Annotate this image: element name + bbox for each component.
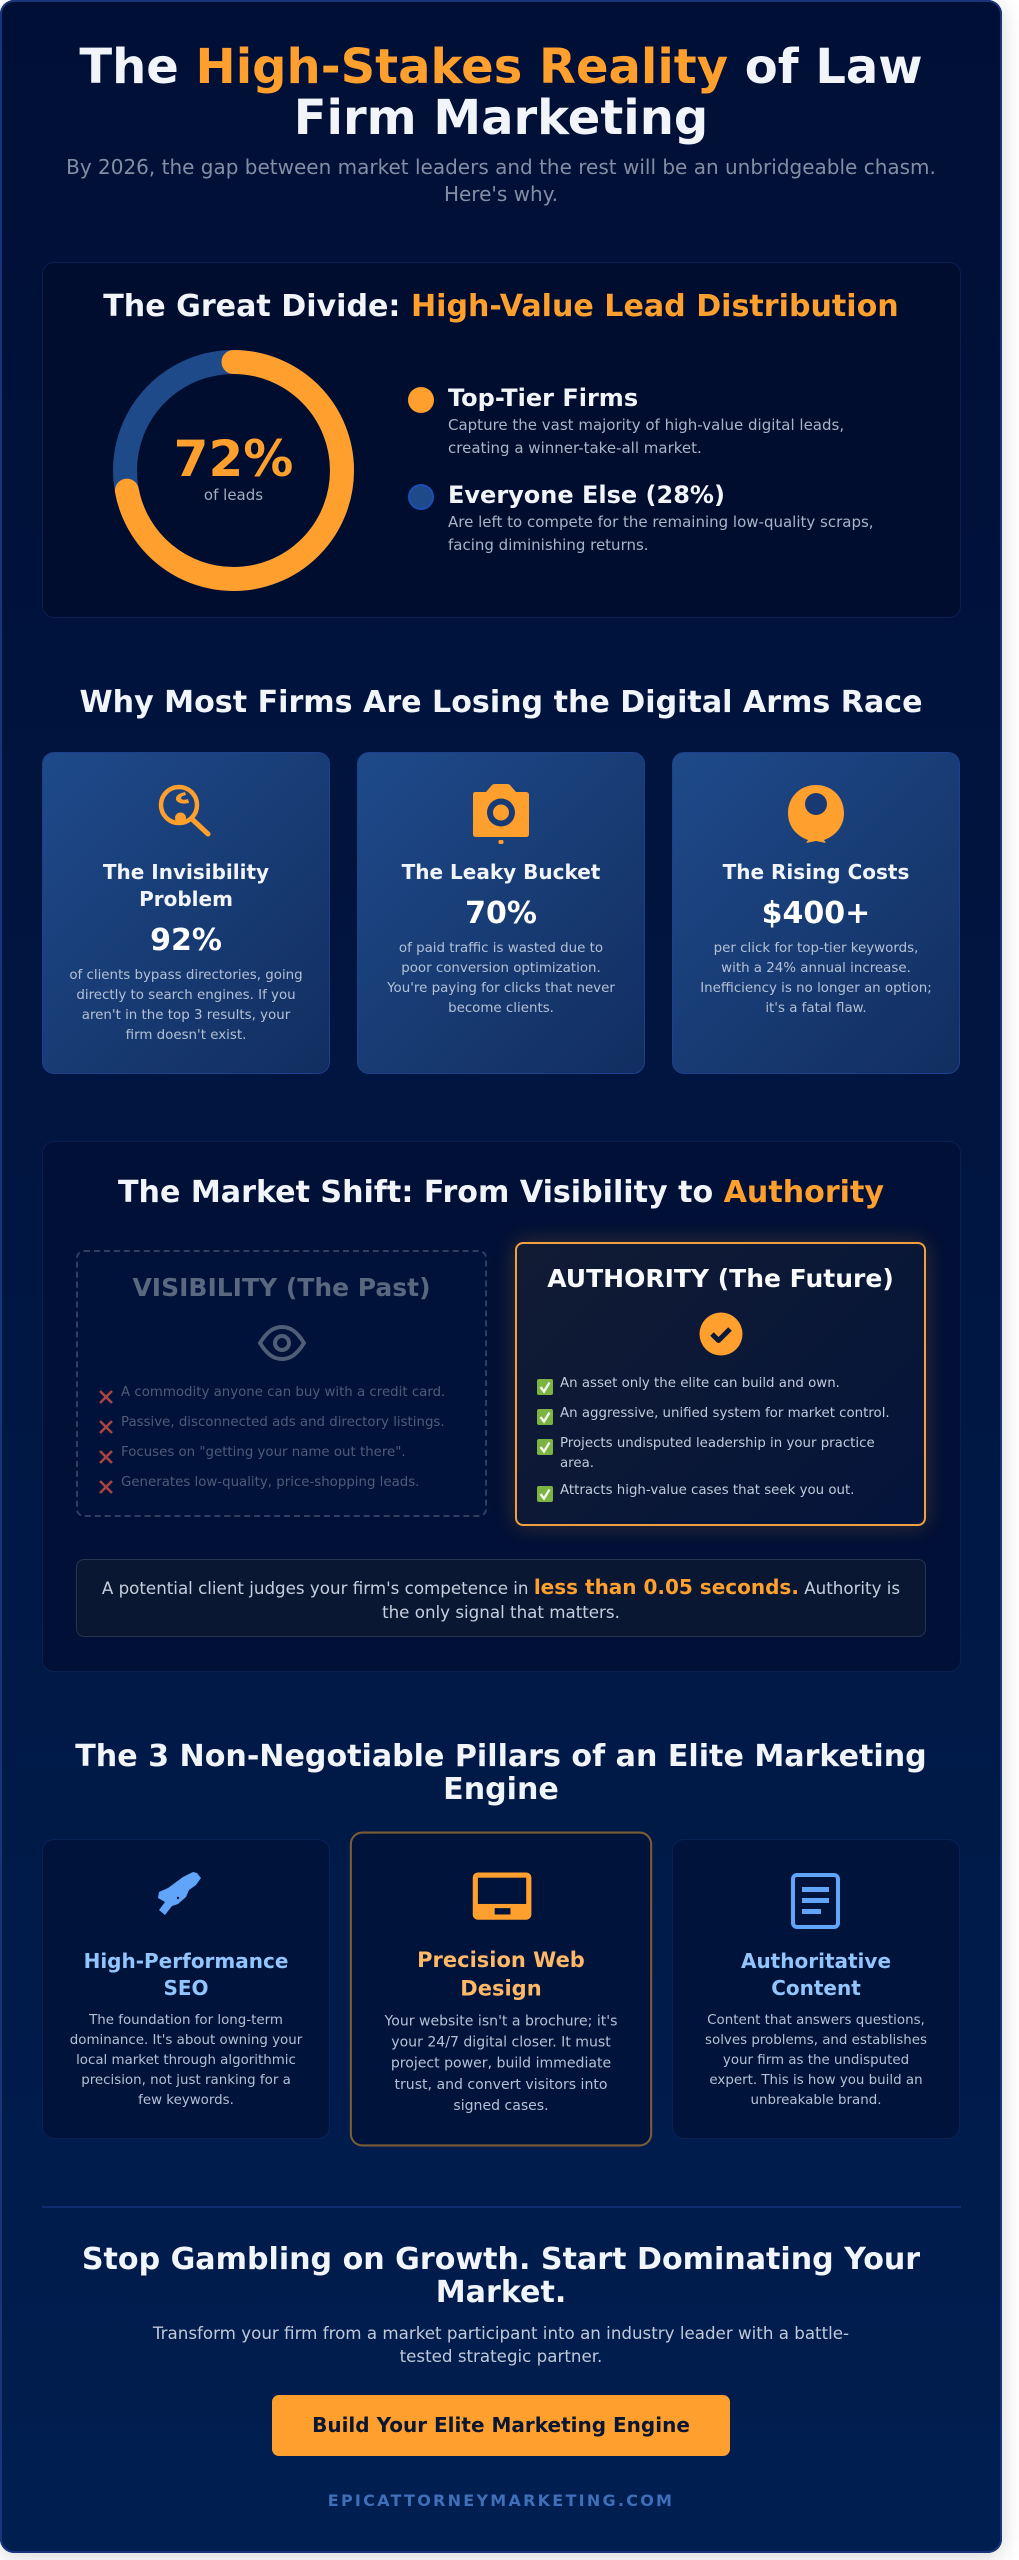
pillar description: [705, 2013, 927, 2108]
list item 2: An aggressive, unified system for market control.: [560, 1406, 890, 1421]
pillar description: expert. This is how you build an: [709, 2073, 923, 2088]
pillar description: The foundation for long-term: [89, 2013, 283, 2028]
pillar description: precision, not just ranking for a: [81, 2073, 291, 2088]
pillar description: dominance. It's about owning your: [70, 2033, 302, 2048]
card description: Inefficiency is no longer an option;: [700, 981, 932, 996]
pillar description: trust, and convert visitors into: [395, 2077, 607, 2093]
icon: document: [791, 1873, 840, 1929]
icon: camera bucket: [473, 784, 529, 844]
legend text: top-tier firms: creating a winner-take-all market.: [448, 439, 702, 457]
legend text: top-tier firms: Capture the vast majority of high-value digital leads,: [448, 416, 844, 434]
legend text: top-tier firms: Top-Tier Firms: [448, 384, 638, 412]
card description: with a 24% annual increase.: [721, 961, 911, 976]
pillar title: Design: [460, 1975, 542, 2001]
list item 3: Projects undisputed leadership in your practice: [560, 1436, 875, 1451]
title: The High-Stakes Reality of Law: [79, 39, 923, 95]
legend text: everyone else: [448, 481, 874, 554]
pillar title: [741, 1949, 891, 2000]
list item 2: Passive, disconnected ads and directory listings.: [121, 1415, 445, 1430]
icon: check circle: [700, 1312, 742, 1356]
donut chart: 72 percent of leads: [113, 350, 354, 591]
card description: [69, 968, 303, 1043]
callout: 0.05 seconds: [76, 1559, 926, 1637]
list item 1: An asset only the elite can build and own.: [560, 1376, 840, 1391]
visibility heading: VISIBILITY (The Past): [132, 1273, 431, 1302]
card title: The Rising Costs: [723, 860, 909, 884]
card description: firm doesn't exist.: [126, 1028, 246, 1043]
heading: three pillars: The 3 Non-Negotiable Pillars of an Elite Marketing: [75, 1738, 927, 1774]
call to action subtext: Transform your firm from a market participant into an industry leader with a battle-: [153, 2323, 849, 2343]
heading: the great divide: The Great Divide: High-Value Lead Distribution: [103, 288, 899, 324]
authority heading: AUTHORITY (The Future): [547, 1264, 894, 1293]
panel: rising costs: [672, 752, 960, 1074]
list item 3: area.: [560, 1456, 594, 1471]
pillar description: solves problems, and establishes: [705, 2033, 927, 2048]
call to action subtext: tested strategic partner.: [400, 2346, 602, 2366]
footer website: EPICATTORNEYMARKETING.COM: [328, 2491, 674, 2510]
icon: eye: [258, 1325, 306, 1361]
icon: magnifier: [158, 784, 210, 836]
card description: [387, 941, 615, 1016]
heading: three pillars: [75, 1738, 927, 1806]
statistic: 70%: 70%: [465, 896, 537, 931]
list item 4: Generates low-quality, price-shopping leads.: [121, 1475, 419, 1490]
card description: [700, 941, 932, 1016]
card title: [102, 860, 269, 911]
heading: market shift: The Market Shift: From Visibility to Authority: [118, 1175, 884, 1210]
panel: high-performance seo: [42, 1839, 330, 2139]
card description: of paid traffic is wasted due to: [399, 941, 603, 956]
statistic: $400+: $400+: [762, 896, 870, 931]
pillar description: [70, 2013, 302, 2108]
panel: authoritative content: [672, 1839, 960, 2139]
heading: three pillars: Engine: [443, 1772, 559, 1806]
panel: visibility the past: [76, 1250, 487, 1517]
authority list: [537, 1376, 890, 1502]
pillar title: Authoritative: [741, 1949, 891, 1973]
icon: monitor: [472, 1872, 532, 1920]
pillar description: signed cases.: [453, 2098, 549, 2114]
pillar description: your firm as the undisputed: [723, 2053, 909, 2068]
card description: of clients bypass directories, going: [69, 968, 303, 983]
pillar description: project power, build immediate: [391, 2056, 611, 2072]
heading: call to action: [82, 2242, 920, 2310]
pillar title: High-Performance: [84, 1949, 288, 1973]
heading: call to action: Stop Gambling on Growth. Start Dominating Your: [82, 2242, 920, 2276]
subtitle: [66, 155, 936, 206]
card description: poor conversion optimization.: [401, 961, 601, 976]
legend text: top-tier firms: [448, 384, 844, 457]
title: [79, 39, 923, 146]
legend text: everyone else: facing diminishing returns.: [448, 536, 649, 554]
button label: Build Your Elite Marketing Engine: [312, 2413, 690, 2437]
list item 3: [537, 1436, 875, 1471]
heading: call to action: Market.: [436, 2274, 566, 2310]
card description: it's a fatal flaw.: [765, 1001, 867, 1016]
subtitle: Here's why.: [444, 182, 558, 206]
pillar title: SEO: [163, 1976, 209, 2000]
donut chart: 72 percent of leads: of leads: [204, 486, 263, 504]
list item 4: Attracts high-value cases that seek you out.: [560, 1483, 854, 1498]
pillar title: Content: [771, 1976, 861, 2000]
button: build your elite marketing engine: [272, 2395, 730, 2456]
list item 3: Focuses on "getting your name out there".: [121, 1445, 406, 1460]
card title: The Invisibility: [103, 860, 269, 884]
pillar title: [417, 1947, 585, 2001]
pillar description: Your website isn't a brochure; it's: [384, 2014, 618, 2030]
icon: pin coin: [788, 785, 844, 843]
pillar title: Precision Web: [417, 1947, 585, 1972]
panel: invisibility problem: [42, 752, 330, 1074]
pillar description: Content that answers questions,: [707, 2013, 925, 2028]
card description: per click for top-tier keywords,: [714, 941, 918, 956]
card title: The Leaky Bucket: [402, 860, 600, 884]
heading: digital arms race: Why Most Firms Are Losing the Digital Arms Race: [79, 684, 923, 720]
callout text: the only signal that matters.: [382, 1602, 620, 1622]
card description: become clients.: [448, 1001, 554, 1016]
panel: the great divide: [42, 262, 961, 618]
card description: You're paying for clicks that never: [387, 981, 615, 996]
subtitle: By 2026, the gap between market leaders and the rest will be an unbridgeable chasm.: [66, 155, 936, 179]
legend text: everyone else: Everyone Else (28%): [448, 481, 725, 509]
icon: rocket pen: [158, 1872, 201, 1915]
panel: market shift: [42, 1141, 961, 1672]
legend text: everyone else: Are left to compete for the remaining low-quality scraps,: [448, 513, 874, 531]
visibility list: [99, 1385, 445, 1494]
list item 1: A commodity anyone can buy with a credit card.: [121, 1385, 445, 1400]
pillar description: [384, 2014, 618, 2114]
card description: aren't in the top 3 results, your: [82, 1008, 290, 1023]
donut chart: 72 percent of leads: 72%: [174, 430, 293, 488]
callout text: [102, 1575, 900, 1622]
panel: precision web design: [350, 1832, 652, 2146]
card title: Problem: [139, 887, 233, 911]
call to action subtext: [152, 2323, 849, 2366]
title: Firm Marketing: [294, 90, 708, 146]
pillar description: your 24/7 digital closer. It must: [391, 2035, 611, 2051]
legend dot: everyone else: [408, 484, 434, 510]
panel: leaky bucket: [357, 752, 645, 1074]
pillar description: local market through algorithmic: [76, 2053, 296, 2068]
card description: directly to search engines. If you: [76, 988, 296, 1003]
panel: authority the future: [515, 1242, 926, 1526]
legend dot: top-tier firms: [408, 387, 434, 413]
pillar description: few keywords.: [138, 2093, 234, 2108]
statistic: 92%: 92%: [150, 923, 222, 958]
pillar title: [84, 1949, 288, 2000]
pillar description: unbreakable brand.: [750, 2093, 882, 2108]
callout text: A potential client judges your firm's competence in less than 0.05 seconds. Authority is: [102, 1575, 900, 1599]
